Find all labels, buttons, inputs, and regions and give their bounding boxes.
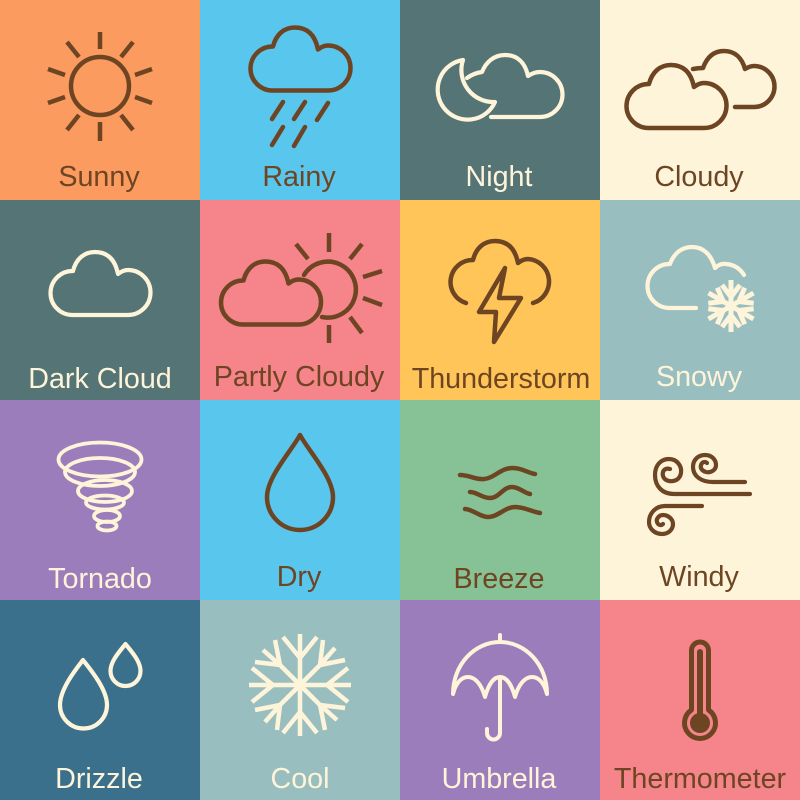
label: Cool: Cool [270,763,330,795]
icon: sun behind cloud [221,233,382,343]
panel: Tornado [0,400,200,600]
panel: Breeze [400,400,600,600]
label: Windy: Windy [659,561,740,593]
label: Drizzle: Drizzle [55,763,143,795]
label: Thunderstorm: Thunderstorm [412,363,590,395]
panel: Windy [600,400,800,600]
panel: Thermometer [600,600,800,800]
icon: thermometer [684,642,716,738]
label: Night: Night [466,161,533,193]
icon: rain cloud [251,28,350,146]
label: Cloudy: Cloudy [654,161,744,193]
icon: cloud [51,252,150,315]
icon: cloud with snowflake [647,247,758,332]
panel: Night [400,0,600,200]
icon: water drop [267,435,333,530]
icon: sun [48,32,152,141]
icon: umbrella [453,635,547,740]
panel: Cloudy [600,0,800,200]
label: Tornado: Tornado [48,563,152,595]
icon: wind swirls [649,455,750,534]
panel: Umbrella [400,600,600,800]
panel: Thunderstorm [400,200,600,400]
icon: two drops [60,644,140,728]
panel: Rainy [200,0,400,200]
panel: Dry [200,400,400,600]
label: Dry: Dry [277,561,322,593]
icon: two clouds [627,51,774,128]
panel: Sunny [0,0,200,200]
label: Sunny: Sunny [58,161,140,193]
panel: Drizzle [0,600,200,800]
label: Breeze: Breeze [454,563,544,595]
label: Umbrella: Umbrella [442,763,556,795]
icon: tornado [58,442,142,530]
icon: waves [460,468,540,517]
label: Thermometer: Thermometer [614,763,787,795]
icon: cloud with lightning [451,241,549,342]
panel: Snowy [600,200,800,400]
panel: Dark Cloud [0,200,200,400]
icon: moon and cloud [438,55,562,120]
panel: Partly Cloudy [200,200,400,400]
panel: Cool [200,600,400,800]
label: Dark Cloud: Dark Cloud [28,363,172,395]
label: Rainy: Rainy [262,161,336,193]
label: Partly Cloudy: Partly Cloudy [214,361,385,393]
icon: snowflake [249,634,351,736]
label: Snowy: Snowy [656,361,743,393]
